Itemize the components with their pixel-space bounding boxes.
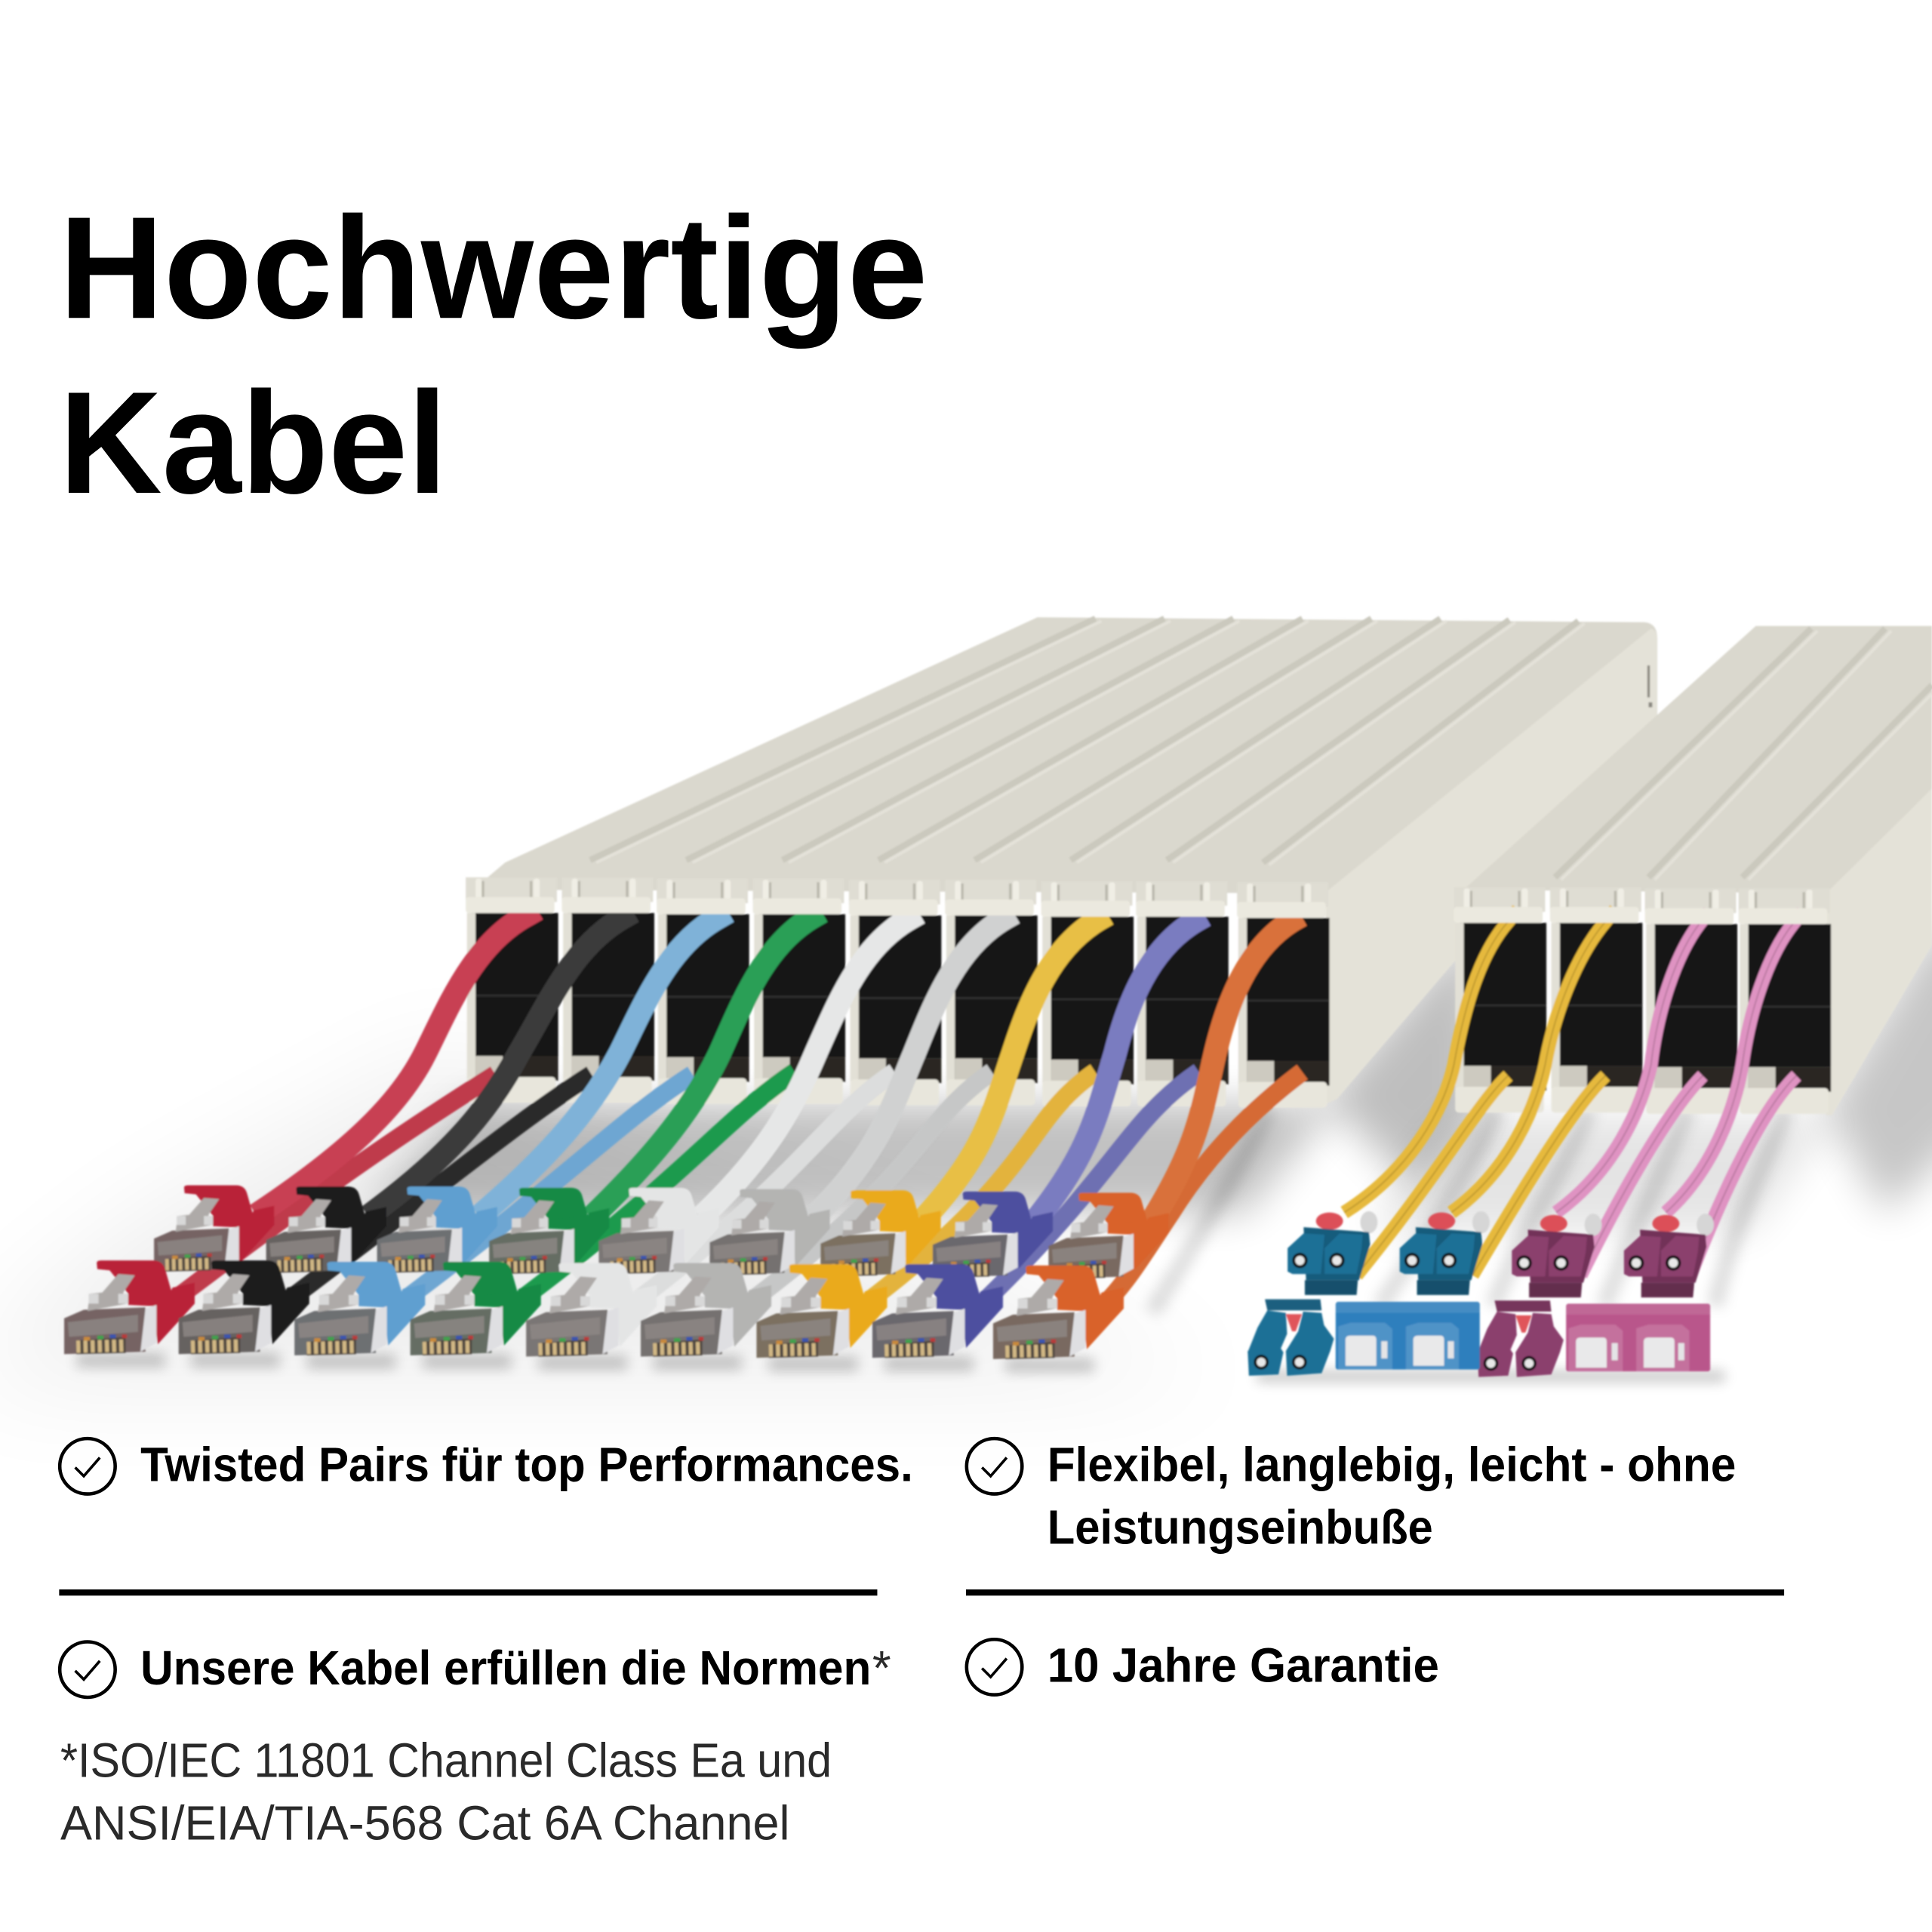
footnote: ANSI/EIA/TIA-568 Cat 6A Channel [60, 1797, 790, 1850]
slot cap bars [466, 897, 1827, 924]
right block ribs [1555, 629, 1932, 880]
right block front slots [1454, 888, 1831, 1114]
divider left [59, 1589, 877, 1595]
right trunking block [1454, 626, 1932, 1115]
divider right [966, 1589, 1784, 1595]
footnote: *ISO/IEC 11801 Channel Class Ea und [60, 1734, 832, 1787]
illustration: cable management with patch cables [0, 617, 1932, 1383]
icon: check circle [60, 1438, 115, 1494]
fiber connectors [1247, 1211, 1714, 1377]
right block side face [1826, 789, 1932, 1115]
text: flexibel: Leistungseinbuße [1048, 1501, 1433, 1555]
back row RJ45 plugs [154, 1186, 1169, 1279]
block top face [473, 617, 1657, 1103]
lower flat patch cables [177, 1072, 1303, 1303]
text: garantie: 10 Jahre Garantie [1048, 1639, 1439, 1693]
block front slots [466, 877, 1330, 1108]
right block top face [1464, 626, 1932, 894]
ground shadows [0, 918, 1932, 1383]
icon: check circle [967, 1438, 1022, 1494]
text: normen: Unsere Kabel erfüllen die Normen [140, 1641, 871, 1695]
bottom row LC connectors [1247, 1300, 1564, 1377]
title: Kabel [59, 361, 448, 524]
text: flexibel [1048, 1438, 1736, 1555]
footnote [60, 1734, 832, 1850]
fiber centre lines [1344, 921, 1796, 1275]
feature: flexibel [967, 1438, 1736, 1555]
fiber optic cables [1344, 909, 1803, 1275]
title [59, 186, 928, 524]
icon: check circle [60, 1642, 115, 1697]
block side face [1326, 629, 1657, 1104]
feature: twisted pairs [60, 1438, 913, 1494]
feature: garantie [967, 1639, 1439, 1695]
text: flexibel: Flexibel, langlebig, leicht - ohne [1048, 1438, 1736, 1491]
text: twisted pairs: Twisted Pairs für top Performances. [140, 1438, 913, 1491]
top row LC duplex connectors [1287, 1211, 1714, 1297]
left trunking block [466, 617, 1657, 1108]
block ribs [590, 619, 1585, 865]
asterisk: * [872, 1641, 891, 1695]
front row RJ45 plugs [64, 1260, 1124, 1359]
upper flat patch cables [257, 909, 1301, 1223]
feature: normen [60, 1641, 891, 1697]
title: Hochwertige [59, 186, 928, 349]
yellow fiber cables [1344, 909, 1615, 1275]
pink fiber cables [1556, 912, 1803, 1275]
icon: check circle [967, 1639, 1022, 1695]
bottom row SC adapters [1336, 1302, 1710, 1371]
